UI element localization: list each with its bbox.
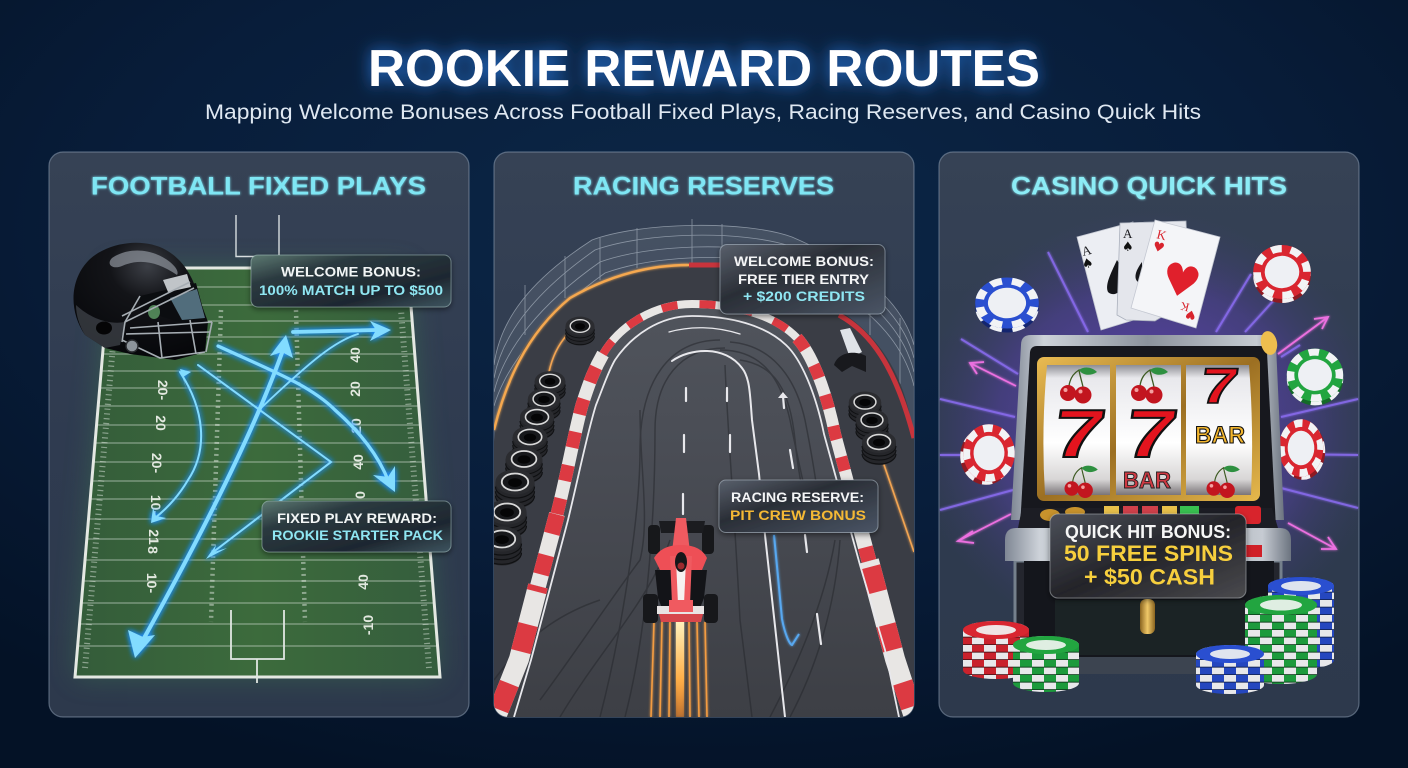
small lane arrow	[778, 392, 788, 398]
football field: 40	[355, 574, 371, 590]
reel symbols: BAR	[1195, 422, 1245, 449]
machine base band	[1005, 528, 1291, 561]
callout: fixed play reward: ROOKIE STARTER PACK	[272, 528, 443, 543]
playing cards: K	[1179, 299, 1191, 315]
callout: welcome bonus racing: WELCOME BONUS:	[734, 254, 874, 269]
track surface	[500, 304, 912, 717]
reel symbols: 7	[1048, 397, 1110, 472]
road markings	[669, 328, 821, 717]
football field: 10-	[148, 495, 164, 515]
chip stacks	[963, 577, 1334, 694]
asphalt	[494, 265, 914, 717]
barrier glow: left	[494, 265, 689, 430]
playing cards	[1077, 220, 1220, 330]
subtitle: Mapping Welcome Bonuses Across Football Fixed Plays, Racing Reserves, and Casino Quick Hits	[205, 101, 1201, 124]
blue racing line	[774, 535, 799, 645]
reels	[1043, 365, 1252, 495]
callout: fixed play reward	[262, 501, 451, 552]
callout: quick hit bonus: 50 FREE SPINS	[1064, 541, 1233, 566]
panel: casino quick hits	[914, 152, 1384, 717]
orange streaks	[549, 335, 914, 552]
callout: quick hit bonus: QUICK HIT BONUS:	[1065, 522, 1231, 542]
skid marks	[494, 340, 840, 717]
football field: -10	[360, 615, 376, 635]
callout: racing reserve: PIT CREW BONUS	[730, 508, 866, 523]
heading: football: FOOTBALL FIXED PLAYS	[91, 172, 426, 200]
callout: welcome bonus: WELCOME BONUS:	[281, 264, 421, 280]
race car	[643, 518, 718, 623]
kerb	[496, 304, 914, 717]
trackside camera	[834, 328, 866, 372]
football field	[75, 268, 440, 677]
football field: 0	[352, 491, 368, 499]
playing cards: A	[1080, 242, 1093, 259]
tire stacks	[482, 317, 896, 565]
panel: football fixed plays	[49, 152, 469, 717]
purple glow	[939, 248, 1359, 578]
gold lever	[1140, 599, 1155, 634]
heading: racing: RACING RESERVES	[573, 172, 834, 200]
pink arrows	[958, 317, 1336, 549]
playing cards: ♥	[1155, 252, 1206, 311]
callout: welcome bonus racing: + $200 CREDITS	[743, 289, 865, 304]
reel symbols: 7	[1197, 358, 1242, 414]
football field: 8	[145, 546, 161, 554]
kerb white lines	[514, 316, 899, 717]
callout: racing reserve	[719, 480, 878, 532]
callout: fixed play reward: FIXED PLAY REWARD:	[277, 511, 437, 526]
goal post: top	[236, 215, 279, 256]
catch fence	[494, 219, 914, 440]
icon: football helmet	[74, 243, 212, 360]
light rays	[940, 252, 1358, 510]
exhaust flames	[651, 620, 707, 717]
callout: quick hit bonus: + $50 CASH	[1084, 564, 1215, 590]
goal post: bottom	[231, 610, 284, 683]
football field: 21	[146, 529, 162, 545]
reel symbols: 7	[1120, 397, 1182, 472]
football field: 10-	[144, 573, 160, 593]
control deck	[1018, 506, 1278, 528]
callout: welcome bonus racing: FREE TIER ENTRY	[738, 272, 869, 287]
playing cards: A	[1123, 226, 1133, 241]
callout: welcome bonus: 100% MATCH UP TO $500	[259, 283, 443, 298]
machine screen	[1020, 346, 1276, 528]
machine frame	[1011, 335, 1284, 520]
title: ROOKIE REWARD ROUTES	[368, 40, 1040, 98]
playing cards: ♠	[1080, 256, 1095, 273]
panel: racing reserves	[482, 152, 914, 717]
casino chips	[960, 245, 1344, 485]
callout: quick hit bonus	[1050, 514, 1246, 598]
football field: 20	[348, 418, 364, 434]
football field: 20-	[155, 380, 171, 400]
callout: welcome bonus	[251, 255, 451, 307]
playing cards: K	[1155, 226, 1169, 243]
football field: 20	[153, 415, 169, 431]
playing cards: ♠	[1122, 240, 1134, 255]
barrier: red	[689, 265, 914, 438]
play arrows	[128, 321, 395, 658]
playing cards: ♥	[1184, 306, 1198, 323]
reel frame	[1037, 357, 1260, 501]
football field: 20	[347, 381, 363, 397]
football field: 40	[347, 347, 363, 363]
callout: welcome bonus racing	[720, 244, 885, 314]
football field: 20-	[149, 453, 165, 473]
reel symbols	[1048, 358, 1245, 498]
reel symbols: BAR	[1123, 467, 1171, 493]
football field: 40	[350, 454, 366, 470]
heading: casino: CASINO QUICK HITS	[1011, 172, 1287, 200]
callout: racing reserve: RACING RESERVE:	[731, 490, 864, 505]
gold knob	[1259, 330, 1279, 356]
playing cards: ♥	[1151, 239, 1166, 257]
slot machine	[1005, 330, 1291, 674]
